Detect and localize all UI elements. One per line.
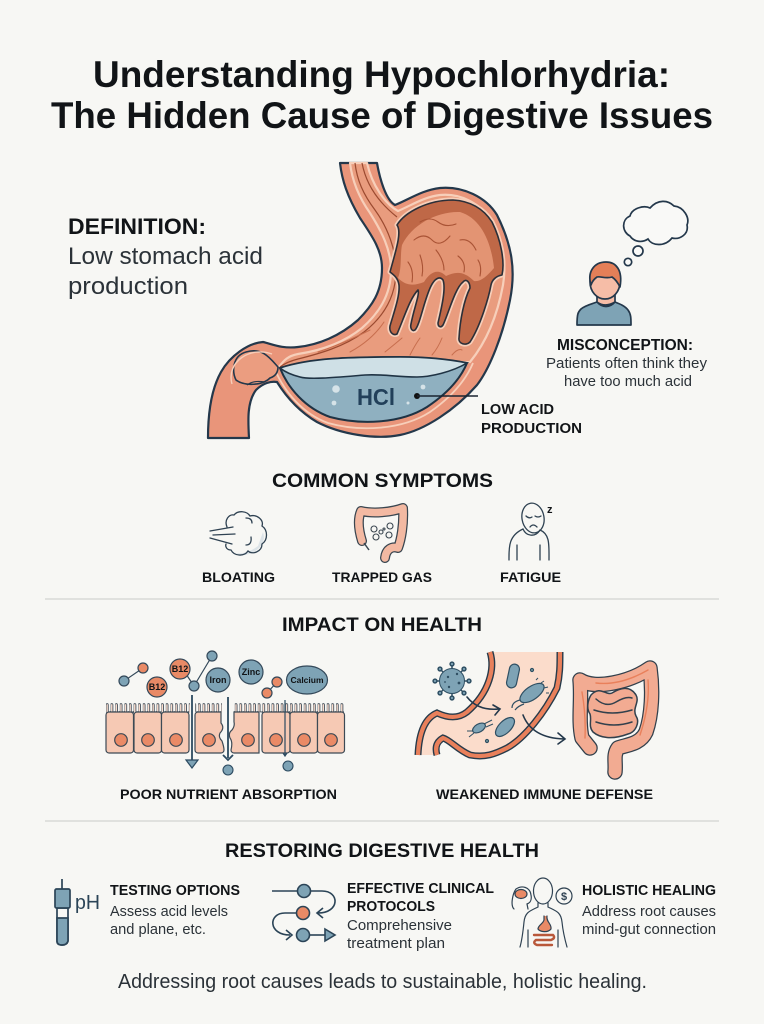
definition text block: production	[68, 273, 188, 300]
icon: person	[577, 262, 631, 325]
HCl label: HCl	[357, 384, 395, 410]
nutrient labels: Calcium	[290, 675, 324, 685]
intestinal cells	[106, 703, 344, 753]
protocols text: treatment plan	[347, 936, 445, 952]
panel: poor nutrient absorption	[106, 651, 344, 802]
stomach lumen and folds	[390, 200, 503, 344]
HCl pool	[280, 357, 467, 422]
heading: common symptoms: COMMON SYMPTOMS	[272, 470, 493, 492]
icon: colon with bubbles	[359, 508, 403, 558]
absorption arrows	[186, 695, 293, 775]
testing options text: Assess acid levels	[110, 904, 228, 920]
callout: low acid production	[481, 402, 582, 437]
pool outer band	[276, 363, 473, 428]
footer statement: Addressing root causes leads to sustainable, holistic healing.	[118, 971, 647, 993]
holistic healing text: mind-gut connection	[582, 922, 716, 938]
bacteria	[467, 663, 549, 742]
heading: impact on health: IMPACT ON HEALTH	[282, 614, 482, 636]
nutrient labels: Iron	[210, 675, 226, 685]
panel: effective clinical protocols	[272, 881, 494, 952]
nutrient labels	[149, 664, 324, 692]
stomach rugae highlight	[398, 212, 494, 285]
protocols text: EFFECTIVE CLINICAL	[347, 881, 494, 897]
stomach inner mucosa	[279, 163, 504, 367]
lower wall lines	[318, 322, 462, 355]
icon: tired person	[509, 501, 549, 560]
nutrient labels: B12	[149, 682, 165, 692]
icon: intestines	[580, 668, 652, 772]
poor nutrient absorption label: POOR NUTRIENT ABSORPTION	[120, 786, 337, 802]
title: Understanding Hypochlorhydria:	[93, 54, 670, 95]
callout: low acid production: PRODUCTION	[481, 421, 582, 437]
protocols text: PROTOCOLS	[347, 899, 435, 915]
nutrient labels: B12	[172, 664, 188, 674]
callout leader	[414, 393, 478, 399]
title	[51, 54, 713, 136]
definition text block	[68, 214, 263, 300]
misconception panel	[546, 201, 707, 390]
misconception text: MISCONCEPTION:	[557, 337, 693, 354]
panel: weakened immune defense	[418, 652, 653, 802]
trapped gas label: TRAPPED GAS	[332, 569, 432, 585]
callout: low acid production: LOW ACID	[481, 402, 554, 418]
testing options text	[110, 883, 240, 938]
pH label: pH	[75, 892, 100, 914]
z mark: z	[547, 504, 553, 516]
symptom: fatigue	[500, 501, 561, 585]
stomach illustration	[208, 163, 513, 438]
icon: virus	[433, 662, 471, 700]
stomach outer wall	[208, 163, 513, 438]
misconception text	[546, 337, 707, 390]
misconception text: have too much acid	[564, 373, 692, 390]
icon: pH test tube	[55, 879, 70, 945]
stomach section	[418, 652, 560, 756]
bloating label: BLOATING	[202, 569, 275, 585]
weakened immune defense label: WEAKENED IMMUNE DEFENSE	[436, 786, 653, 802]
protocols text	[347, 881, 494, 952]
panel: testing options	[55, 879, 240, 945]
infection arrows	[467, 697, 565, 744]
fatigue label: FATIGUE	[500, 569, 561, 585]
heading: restoring digestive health: RESTORING DIGESTIVE HEALTH	[225, 840, 539, 862]
nutrient molecules	[119, 651, 328, 698]
icon: body with gut, brain and dollar	[512, 878, 572, 947]
holistic healing text	[582, 883, 716, 938]
symptom: trapped gas	[332, 508, 432, 585]
misconception text: Patients often think they	[546, 355, 707, 372]
protocols text: Comprehensive	[347, 918, 452, 934]
symptom: bloating	[202, 512, 275, 585]
nutrient labels: Zinc	[242, 667, 260, 677]
panel: holistic healing	[512, 878, 716, 947]
icon: body with gut, brain and dollar: $	[561, 891, 567, 903]
definition text block: DEFINITION:	[68, 214, 206, 239]
icon: gas cloud	[210, 512, 266, 555]
icon: protocol flow	[272, 884, 335, 942]
title: The Hidden Cause of Digestive Issues	[51, 95, 713, 136]
holistic healing text: Address root causes	[582, 904, 716, 920]
icon: thought cloud	[624, 201, 688, 266]
testing options text: TESTING OPTIONS	[110, 883, 240, 899]
testing options text: and plane, etc.	[110, 922, 206, 938]
pylorus sphincter	[234, 351, 278, 384]
holistic healing text: HOLISTIC HEALING	[582, 883, 716, 899]
definition text block: Low stomach acid	[68, 243, 263, 270]
